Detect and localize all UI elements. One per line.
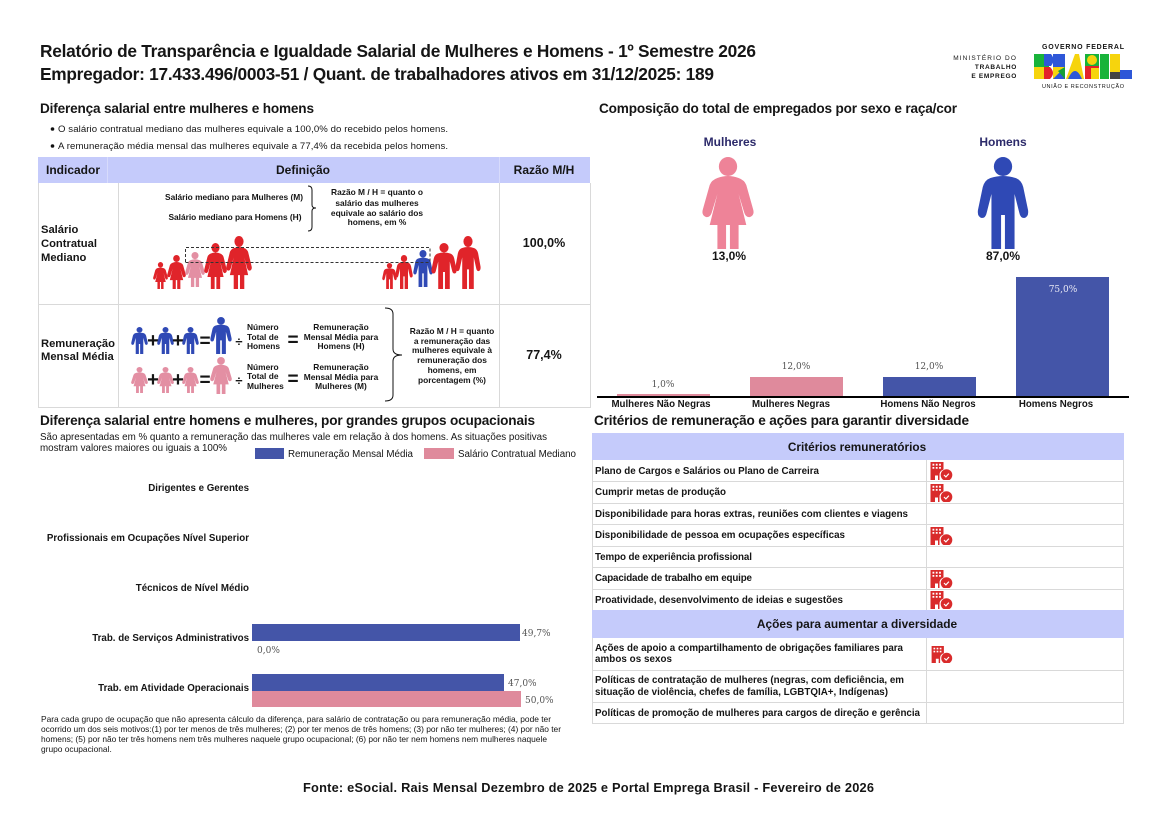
- formula: mulheres: Mulheres (M): [315, 381, 367, 391]
- row: remuneração mensal média: mulheres equivale à: [412, 345, 492, 355]
- formula: mulheres: +: [172, 369, 184, 391]
- row: salário contratual mediano: Salário mediano para Mulheres (M): [165, 192, 303, 202]
- row: salário contratual mediano: Salário mediano para Homens (H): [168, 212, 302, 222]
- row: remuneração mensal média: homens, em: [428, 365, 476, 375]
- figure: mulheres 13,0%: [702, 135, 757, 263]
- row: salário contratual mediano: homens, em %: [348, 217, 407, 227]
- legend: Remuneração Mensal Média: [288, 449, 414, 460]
- header: ações para aumentar a diversidade: Ações para aumentar a diversidade: [757, 617, 958, 631]
- row: remuneração mensal média: Mensal Média: [41, 351, 115, 363]
- rows: ações: ambos os sexos: [595, 654, 673, 665]
- header: ações para aumentar a diversidade: [592, 610, 1124, 638]
- source: Fonte: eSocial. Rais Mensal Dezembro de 2025 e Portal Emprega Brasil - Fevereiro de 2026: [303, 780, 874, 795]
- row: remuneração mensal média: a remuneração das: [414, 336, 491, 346]
- figure: homens 87,0%: Homens: [979, 135, 1027, 149]
- row: remuneração mensal média: remuneração dos: [417, 355, 487, 365]
- title: [40, 41, 756, 84]
- formula: mulheres: Remuneração: [313, 362, 369, 372]
- panel: critérios e ações: [592, 433, 1124, 724]
- heading: critérios: Critérios de remuneração e ações para garantir diversidade: [594, 413, 969, 428]
- logo: ministério e governo federal: MINISTÉRIO DO: [953, 53, 1017, 62]
- formula: mulheres: Mensal Média para: [304, 372, 379, 382]
- formula: homens: Homens: [247, 341, 280, 351]
- logo: ministério e governo federal: TRABALHO: [975, 64, 1017, 71]
- formula: homens: [131, 317, 379, 354]
- footnote: ocorrido um dos seis motivos:(1) por ter menos de três mulheres; (2) por ter menos de três homens; (3) por não ter mulheres; (4) por não ter: [41, 724, 561, 734]
- bar chart: composição por sexo e raça/cor: 12,0%: [782, 362, 811, 372]
- rows: ações: [595, 643, 952, 719]
- bar chart: grupos ocupacionais: Trab. de Serviços Administrativos: [92, 633, 250, 644]
- rows: ações: situação de violência, chefes de família, LGBTQIA+, Indígenas): [595, 687, 888, 698]
- formula: homens: Número: [247, 322, 279, 332]
- figure: mulheres 13,0%: 13,0%: [712, 249, 746, 263]
- figures: mediana: [153, 236, 481, 289]
- row: remuneração mensal média: porcentagem (%): [418, 375, 486, 385]
- formula: homens: =: [287, 330, 299, 351]
- table header: Definição: [276, 163, 330, 177]
- row: salário contratual mediano: Razão M / H = quanto o: [331, 187, 423, 197]
- title: Empregador: 17.433.496/0003-51 / Quant. de trabalhadores ativos em 31/12/2025: 189: [40, 64, 714, 84]
- bar chart: grupos ocupacionais: 50,0%: [525, 696, 554, 706]
- panel: tabela indicadores: [38, 157, 590, 408]
- formula: mulheres: +: [147, 369, 159, 391]
- formula: homens: ÷: [235, 334, 243, 349]
- title: Relatório de Transparência e Igualdade Salarial de Mulheres e Homens - 1º Semestre 2026: [40, 41, 756, 61]
- bar chart: grupos ocupacionais: 47,0%: [508, 679, 537, 689]
- bullet list: O salário contratual mediano das mulheres equivale a 100,0% do recebido pelos homens.: [58, 124, 448, 135]
- figure: homens 87,0%: [978, 135, 1028, 263]
- row: salário contratual mediano: [41, 186, 565, 289]
- bar chart: composição por sexo e raça/cor: 75,0%: [1049, 285, 1078, 295]
- bar chart: grupos ocupacionais: Técnicos de Nível Médio: [136, 583, 249, 594]
- formula: mulheres: [131, 357, 379, 394]
- rows: ações: Políticas de contratação de mulheres (negras, com deficiência, em: [595, 675, 904, 686]
- footnote: Para cada grupo de ocupação que não apresenta cálculo da diferença, para salário de contratação ou para remuneração média, pode ter: [41, 714, 551, 724]
- rows: critérios: Disponibilidade para horas extras, reuniões com clientes e viagens: [595, 509, 909, 520]
- footnote: homens; (5) por não ter três homens nem três mulheres naquele grupo ocupacional; (6) por não ter nem homens nem mulheres naquele: [41, 734, 547, 744]
- rows: critérios: Tempo de experiência profissional: [595, 552, 752, 563]
- bar chart: composição por sexo e raça/cor: Mulheres Negras: [752, 399, 830, 410]
- formula: homens: Total de: [247, 332, 279, 342]
- formula: mulheres: ÷: [235, 373, 243, 388]
- formula: mulheres: Mulheres: [247, 381, 284, 391]
- row: salário contratual mediano: Mediano: [41, 252, 87, 264]
- header: critérios remuneratórios: Critérios remuneratórios: [788, 440, 927, 454]
- formula: mulheres: Total de: [247, 371, 279, 381]
- bar chart: grupos ocupacionais: Dirigentes e Gerentes: [148, 483, 250, 494]
- bar chart: grupos ocupacionais: [47, 483, 554, 707]
- row: remuneração mensal média: [41, 308, 562, 401]
- row: remuneração mensal média: Razão M / H = quanto: [410, 326, 494, 336]
- row: salário contratual mediano: salário das mulheres: [335, 198, 419, 208]
- formula: mulheres: Número: [247, 362, 279, 372]
- formula: mulheres: =: [287, 369, 299, 390]
- row: salário contratual mediano: 100,0%: [523, 236, 565, 250]
- row: salário contratual mediano: equivale ao salário dos: [331, 208, 423, 218]
- formula: mulheres: =: [199, 370, 211, 391]
- legend: Salário Contratual Mediano: [458, 449, 577, 460]
- table header: [38, 157, 590, 183]
- bar chart: composição por sexo e raça/cor: Homens Negros: [1019, 399, 1093, 410]
- heading: diferença salarial: Diferença salarial entre mulheres e homens: [40, 101, 314, 116]
- figure: homens 87,0%: 87,0%: [986, 249, 1020, 263]
- logo: ministério e governo federal: E EMPREGO: [971, 73, 1017, 80]
- figure: mulheres 13,0%: Mulheres: [704, 135, 757, 149]
- bar chart: composição por sexo e raça/cor: 12,0%: [915, 362, 944, 372]
- rows: ações: Políticas de promoção de mulheres para cargos de direção e gerência: [595, 708, 921, 719]
- rows: critérios: Disponibilidade de pessoa em ocupações específicas: [595, 530, 846, 541]
- formula: homens: +: [172, 330, 184, 352]
- text block: explicação: [40, 432, 547, 454]
- row: remuneração mensal média: Remuneração: [41, 338, 115, 350]
- header: critérios remuneratórios: [592, 433, 1124, 460]
- heading: composição: Composição do total de empregados por sexo e raça/cor: [599, 101, 958, 116]
- rows: critérios: [595, 462, 952, 610]
- bar chart: grupos ocupacionais: 0,0%: [257, 646, 280, 656]
- legend: [255, 448, 577, 460]
- row: salário contratual mediano: Salário: [41, 224, 78, 236]
- rows: critérios: Plano de Cargos e Salários ou Plano de Carreira: [595, 466, 820, 477]
- bar chart: grupos ocupacionais: Trab. em Atividade Operacionais: [98, 683, 250, 694]
- bar chart: composição por sexo e raça/cor: Mulheres Não Negras: [611, 399, 711, 410]
- bar chart: composição por sexo e raça/cor: Homens Não Negros: [880, 399, 976, 410]
- logo: ministério e governo federal: [953, 44, 1132, 90]
- formula: homens: =: [199, 331, 211, 352]
- bullet list: A remuneração média mensal das mulheres equivale a 77,4% da recebida pelos homens.: [58, 141, 448, 152]
- rows: critérios: Proatividade, desenvolvimento de ideias e sugestões: [595, 595, 844, 606]
- row: remuneração mensal média: 77,4%: [526, 348, 562, 362]
- rows: critérios: Cumprir metas de produção: [595, 487, 726, 498]
- bar chart: composição por sexo e raça/cor: [597, 277, 1129, 410]
- footnote: grupo ocupacional.: [41, 744, 112, 754]
- formula: homens: +: [147, 330, 159, 352]
- table header: Indicador: [46, 163, 100, 177]
- formula: homens: Remuneração: [313, 322, 369, 332]
- text block: explicação: mostram valores maiores ou iguais a 100%: [40, 443, 227, 454]
- bar chart: composição por sexo e raça/cor: 1,0%: [652, 380, 675, 390]
- table header: Razão M/H: [514, 163, 574, 177]
- formula: homens: Homens (H): [318, 341, 365, 351]
- text block: explicação: São apresentadas em % quanto a remuneração das mulheres vale em relação à dos homens. As situações positivas: [40, 432, 547, 443]
- rows: critérios: Capacidade de trabalho em equipe: [595, 573, 753, 584]
- logo: ministério e governo federal: UNIÃO E RECONSTRUÇÃO: [1042, 83, 1125, 90]
- bullet list: [51, 124, 448, 152]
- rows: ações: Ações de apoio a compartilhamento de obrigações familiares para: [595, 643, 904, 654]
- bar chart: grupos ocupacionais: Profissionais em Ocupações Nível Superior: [47, 533, 249, 544]
- row: salário contratual mediano: Contratual: [41, 238, 97, 250]
- heading: grupos ocupacionais: Diferença salarial entre homens e mulheres, por grandes grupos ocupacionais: [40, 413, 535, 428]
- bar chart: grupos ocupacionais: 49,7%: [522, 629, 551, 639]
- formula: homens: Mensal Média para: [304, 332, 379, 342]
- logo: ministério e governo federal: GOVERNO FEDERAL: [1042, 44, 1125, 51]
- footnote: [41, 714, 561, 754]
